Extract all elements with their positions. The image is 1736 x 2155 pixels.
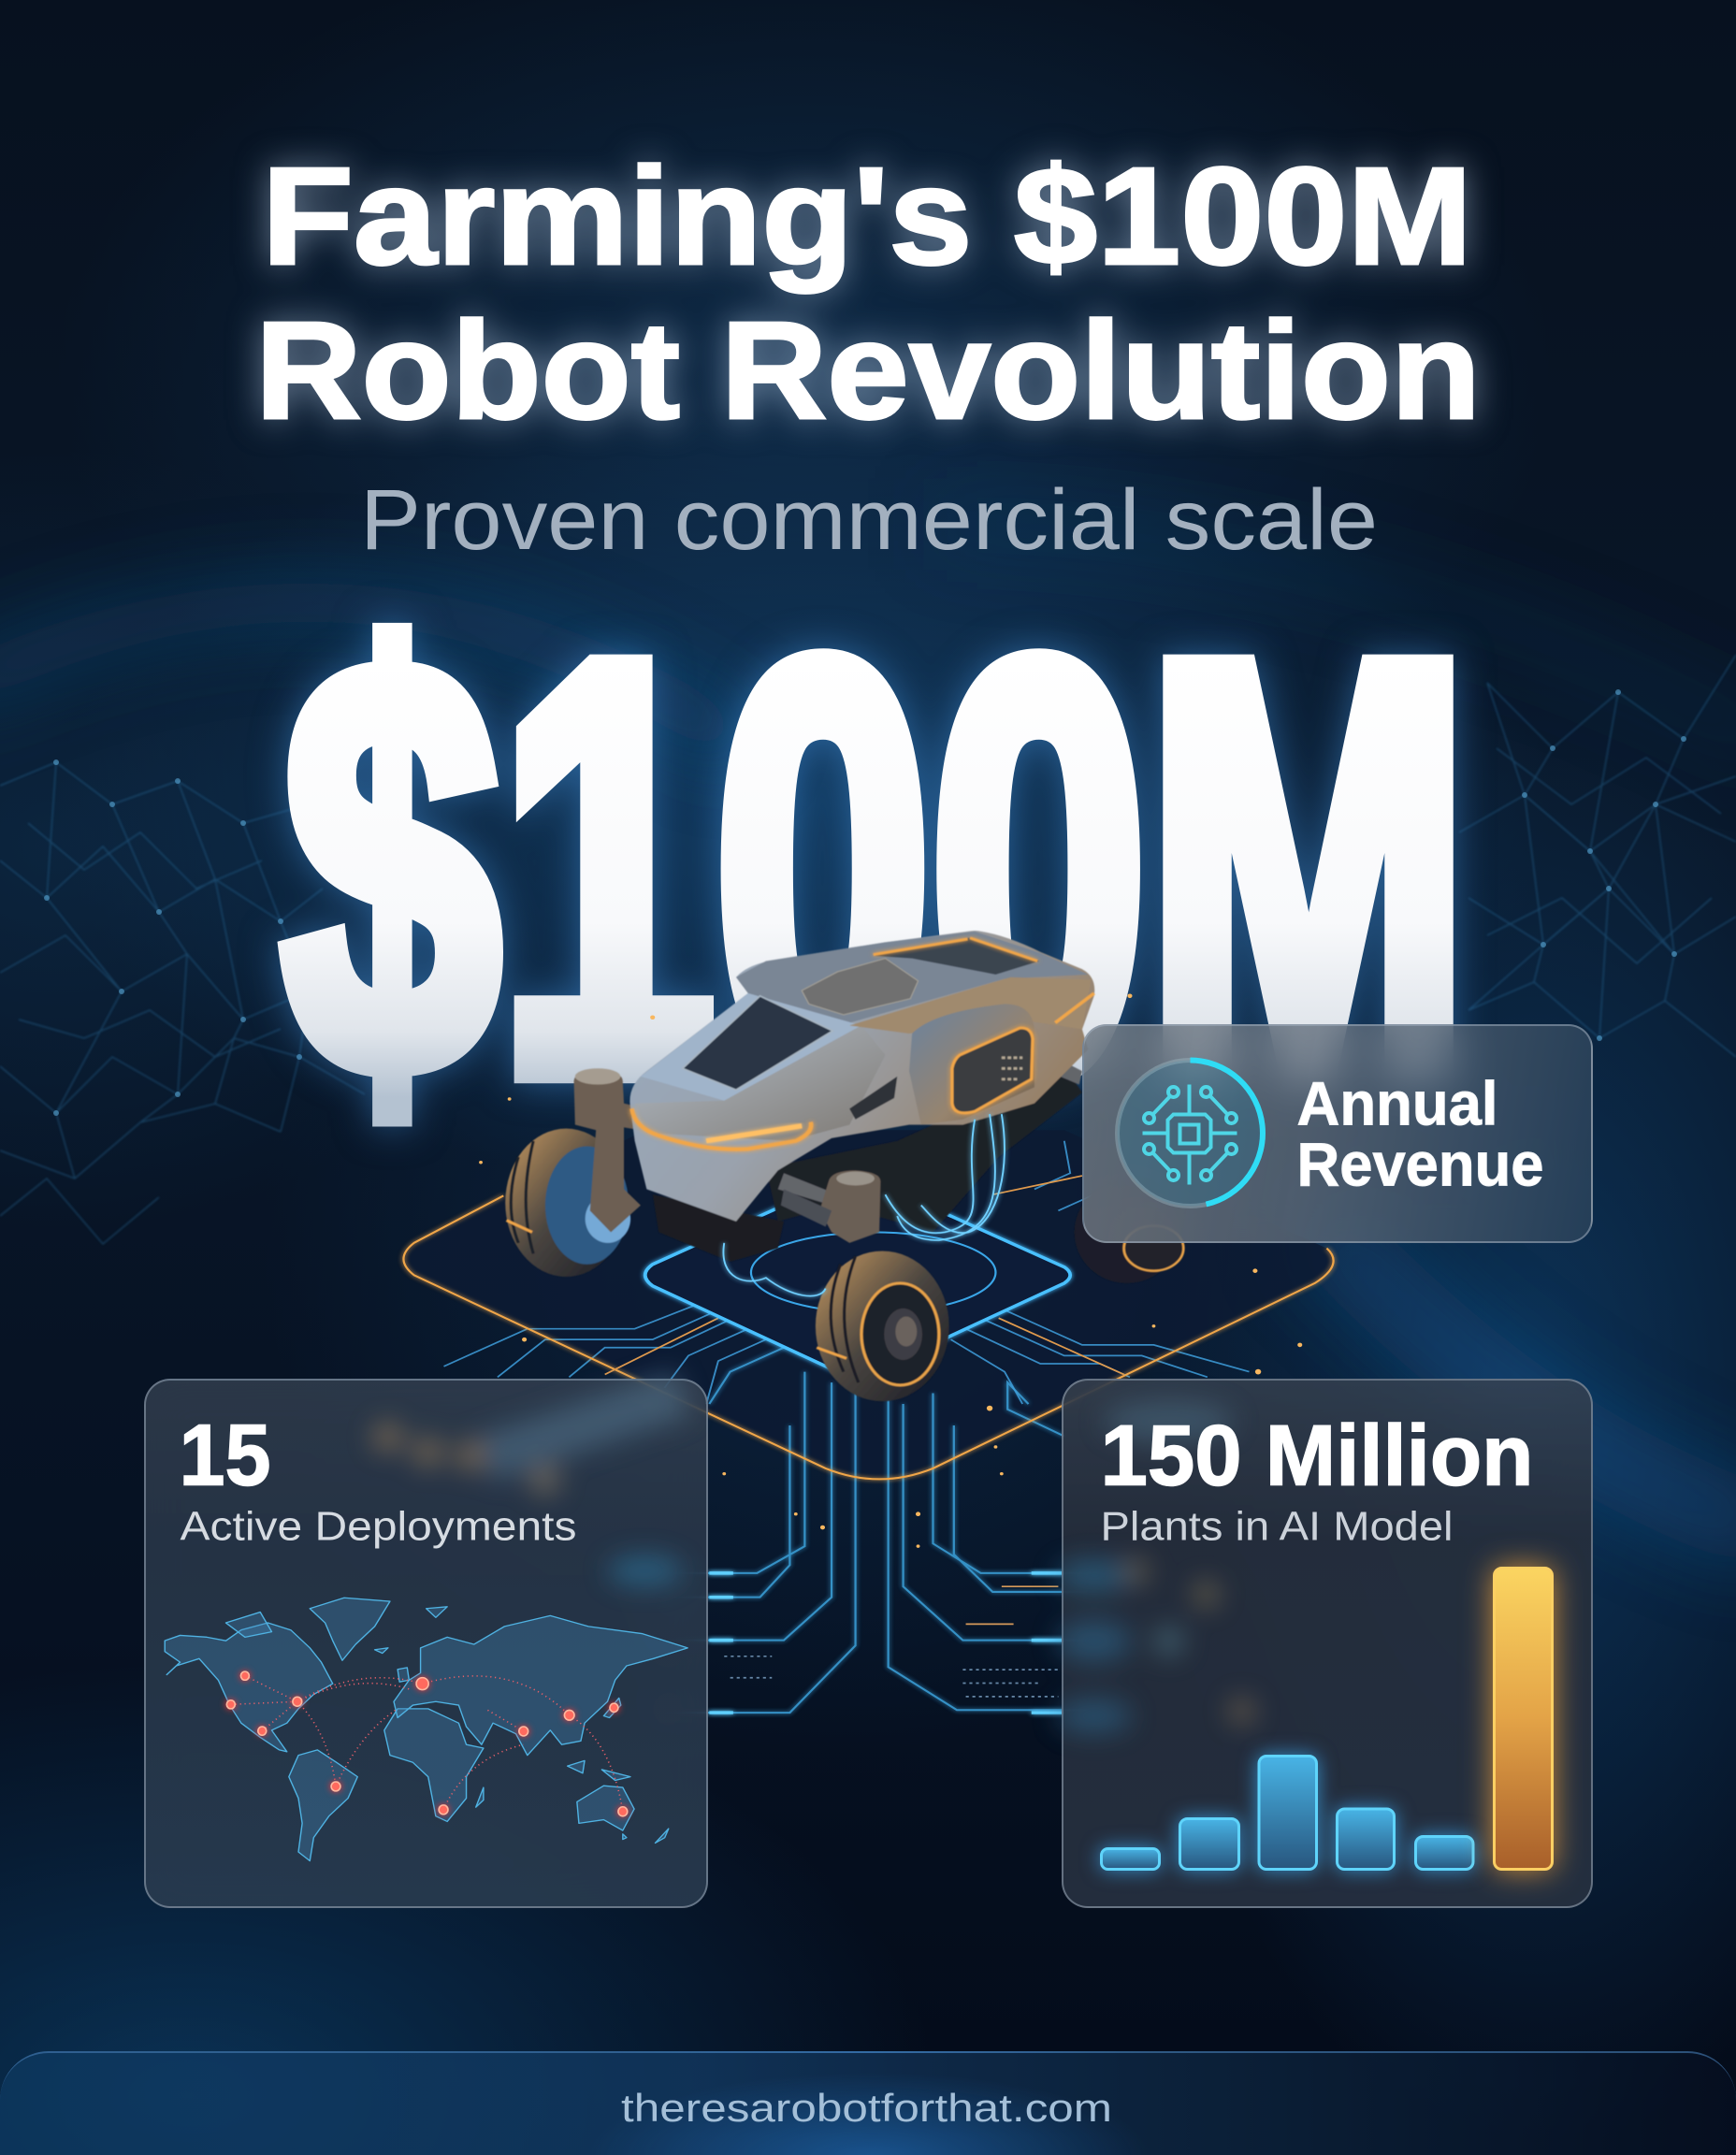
robot chassis undercarriage xyxy=(653,1194,784,1262)
world map xyxy=(165,1598,687,1861)
route arcs xyxy=(231,1676,623,1812)
robot body shell xyxy=(629,931,1094,1222)
left wheel xyxy=(505,1129,630,1277)
blurred bokeh behind glass xyxy=(1057,1401,1255,1732)
side module xyxy=(909,1004,1034,1125)
light bars at trace ends xyxy=(709,1573,1064,1713)
label: annual revenue: Annual xyxy=(1296,1068,1498,1137)
front wheel xyxy=(816,1251,949,1401)
sparks xyxy=(479,994,1302,1548)
hex top plate xyxy=(802,959,919,1015)
front light strip xyxy=(631,1108,811,1150)
rear wheel xyxy=(1075,1181,1179,1283)
label: annual revenue xyxy=(1296,1068,1543,1199)
dark window xyxy=(683,996,832,1090)
deployment markers xyxy=(226,1671,628,1816)
panel: active deployments xyxy=(144,1379,708,1908)
title xyxy=(241,139,1495,448)
big number: $100M: $100M xyxy=(283,543,1469,1193)
rear deck xyxy=(874,938,1039,975)
title: Farming's $100M xyxy=(262,139,1472,294)
platform floor xyxy=(403,1130,1334,1479)
footer url: theresarobotforthat.com xyxy=(621,2086,1112,2130)
label: plants in AI model: Plants in AI Model xyxy=(1100,1504,1454,1549)
title: Robot Revolution xyxy=(255,294,1481,448)
bar chart xyxy=(1102,1568,1553,1869)
vertical circuit traces xyxy=(646,1345,1124,1713)
front fork xyxy=(819,1170,880,1243)
left fork arm xyxy=(574,1070,646,1232)
panel: annual revenue xyxy=(1082,1024,1593,1243)
diagonal circuit traces xyxy=(443,1141,1250,1404)
panel: plants in AI model xyxy=(1062,1379,1593,1908)
label: active deployments: Active Deployments xyxy=(180,1504,576,1549)
label: annual revenue: Revenue xyxy=(1296,1130,1543,1199)
blue cables xyxy=(723,1114,1005,1296)
footer bar xyxy=(0,2051,1736,2155)
subtitle: Proven commercial scale xyxy=(360,472,1378,568)
blue diamond pad xyxy=(645,1173,1070,1376)
stat: 150 million: 150 Million xyxy=(1100,1409,1534,1504)
orange platform loop xyxy=(403,1195,1334,1479)
icon: circuit chip in ring xyxy=(1117,1061,1263,1207)
blurred bokeh behind glass xyxy=(372,1394,683,1586)
stat: 15: 15 xyxy=(180,1407,271,1504)
